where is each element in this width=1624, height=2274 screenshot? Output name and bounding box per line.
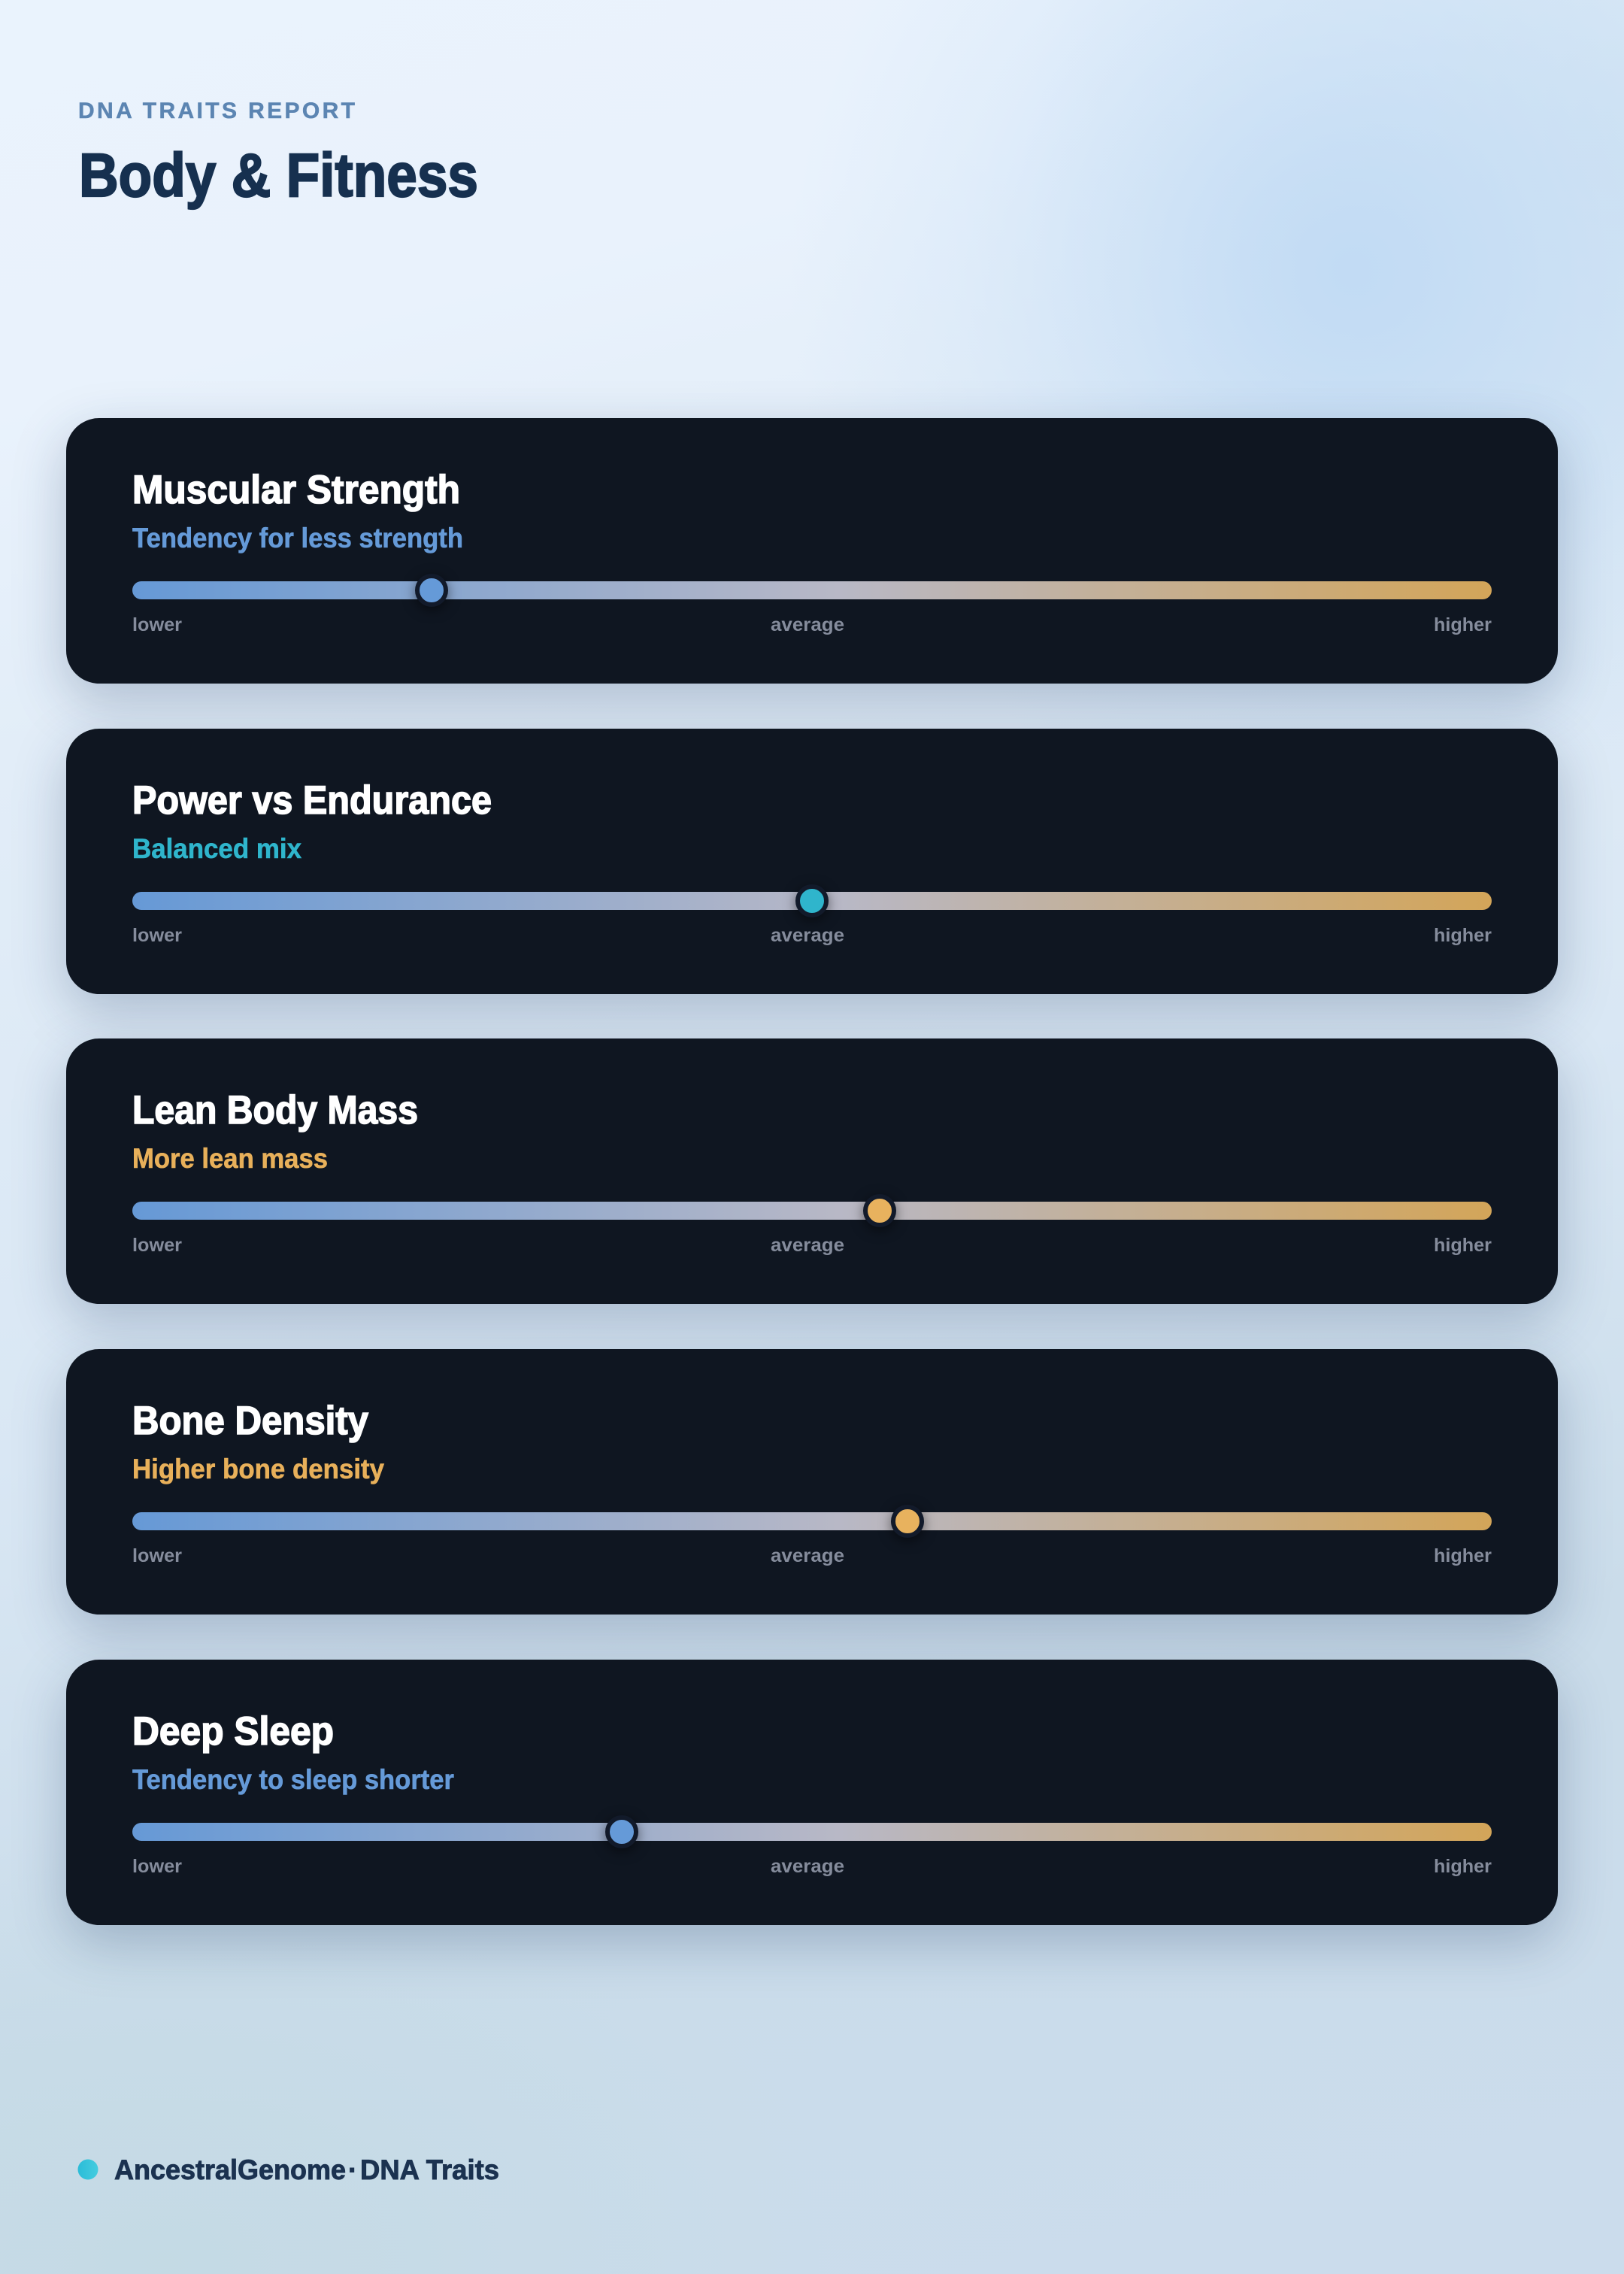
trait result: Tendency for less strength (132, 523, 463, 553)
scale label higher: higher (1434, 1545, 1492, 1566)
brand text: DNA Traits (360, 2154, 499, 2185)
scale label lower: lower (132, 925, 182, 946)
slider track (132, 581, 1492, 599)
card text (132, 778, 1492, 946)
scale label lower: lower (132, 614, 182, 635)
scale label lower: lower (132, 1856, 182, 1877)
title: Body & Fitness: Body & Fitness (79, 141, 478, 210)
scale label average: average (771, 1235, 844, 1256)
trait result: More lean mass (132, 1143, 328, 1174)
scale label average: average (771, 614, 844, 635)
card text (132, 1709, 1492, 1877)
scale label average: average (771, 1545, 844, 1566)
footer (78, 2154, 499, 2185)
panel: Bone Density (66, 1349, 1558, 1615)
panel: Power vs Endurance (66, 729, 1558, 994)
trait result: Balanced mix (132, 833, 301, 864)
trait name: Deep Sleep (132, 1709, 334, 1754)
panel: Deep Sleep (66, 1660, 1558, 1925)
slider thumb at 50% (795, 884, 829, 917)
trait result: Tendency to sleep shorter (132, 1764, 454, 1795)
icon: brand dot (78, 2160, 98, 2179)
slider track (132, 1823, 1492, 1841)
panel: Muscular Strength (66, 418, 1558, 684)
trait name: Bone Density (132, 1399, 368, 1443)
scale label higher: higher (1434, 614, 1492, 635)
trait name: Lean Body Mass (132, 1088, 418, 1132)
slider thumb at 36% (605, 1815, 638, 1848)
slider track (132, 1202, 1492, 1220)
scale label average: average (771, 925, 844, 946)
slider thumb at 22% (415, 574, 448, 607)
scale label lower: lower (132, 1235, 182, 1256)
scale label higher: higher (1434, 1235, 1492, 1256)
brand text: AncestralGenome (114, 2154, 346, 2185)
trait name: Muscular Strength (132, 468, 460, 512)
slider track (132, 1512, 1492, 1530)
slider thumb at 55% (863, 1194, 896, 1227)
header (78, 99, 478, 211)
slider thumb at 57% (891, 1505, 924, 1538)
eyebrow: DNA Traits Report: DNA TRAITS REPORT (78, 99, 355, 123)
slider track (132, 892, 1492, 910)
scale label lower: lower (132, 1545, 182, 1566)
trait result: Higher bone density (132, 1454, 384, 1484)
scale label average: average (771, 1856, 844, 1877)
card text (132, 1399, 1492, 1566)
card text (132, 468, 1492, 635)
brand text (114, 2154, 499, 2185)
scale label higher: higher (1434, 925, 1492, 946)
scale label higher: higher (1434, 1856, 1492, 1877)
brand text: · (348, 2154, 357, 2185)
card text (132, 1088, 1492, 1256)
panel: Lean Body Mass (66, 1038, 1558, 1304)
trait name: Power vs Endurance (132, 778, 492, 823)
